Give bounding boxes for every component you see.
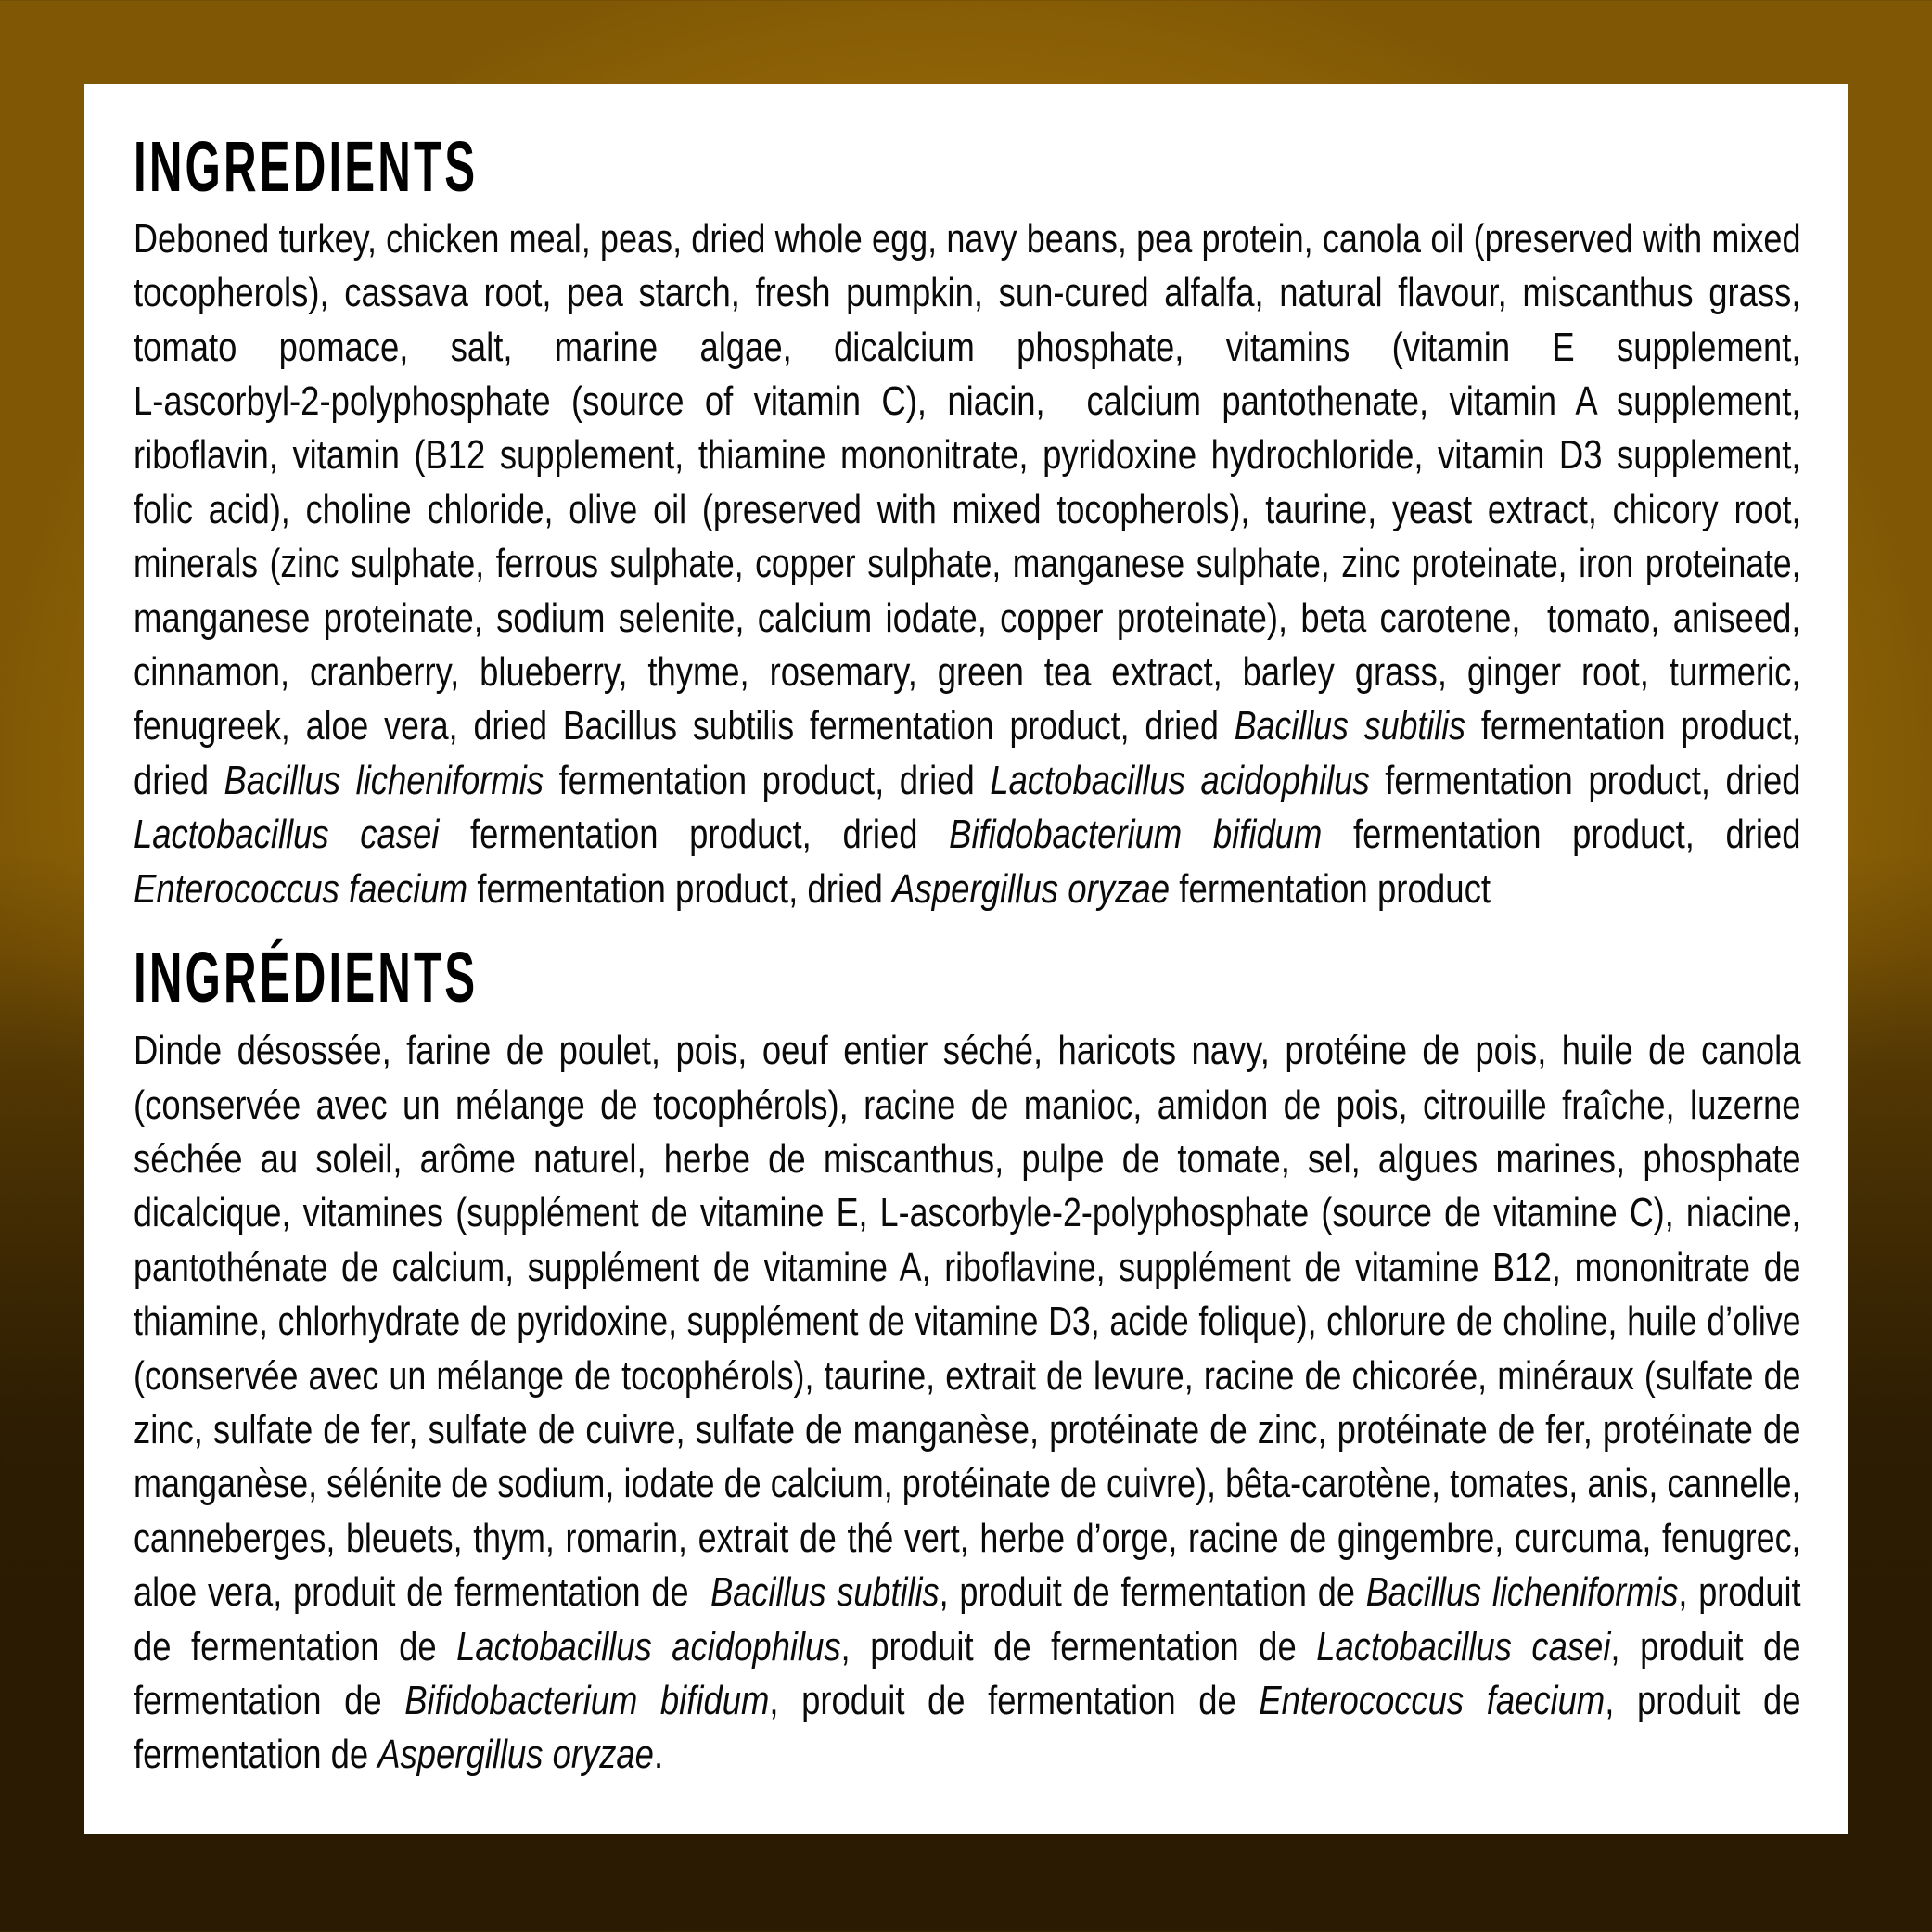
- text block: French ingredients: [134, 1028, 1801, 1777]
- text block: French ingredients: aloe vera, produit de fermentation de Bacillus subtilis, produit de fermentation de Bacillus licheniformis, produit: [134, 1569, 1800, 1615]
- heading: INGRÉDIENTS: INGRÉDIENTS: [134, 937, 478, 1017]
- text block: English ingredients: L-ascorbyl-2-polyphosphate (source of vitamin C), niacin, calcium pantothenate, vitamin A supplement,: [134, 378, 1800, 424]
- text block: French ingredients: de fermentation de Lactobacillus acidophilus, produit de fermentation de Lactobacillus casei, produit de: [134, 1624, 1800, 1670]
- text block: English ingredients: tocopherols), cassava root, pea starch, fresh pumpkin, sun-cured alfalfa, natural flavour, miscanthus grass,: [134, 270, 1800, 315]
- text block: English ingredients: fenugreek, aloe vera, dried Bacillus subtilis fermentation product, dried Bacillus subtilis fermentation product,: [134, 703, 1800, 748]
- text block: French ingredients: dicalcique, vitamines (supplément de vitamine E, L-ascorbyle-2-polyphosphate (source de vitamine C), niacine,: [134, 1190, 1800, 1235]
- text block: French ingredients: canneberges, bleuets, thym, romarin, extrait de thé vert, herbe d’orge, racine de gingembre, curcuma, fenugrec,: [134, 1516, 1800, 1561]
- text block: French ingredients: fermentation de Bifidobacterium bifidum, produit de fermentation de Enterococcus faecium, produit de: [134, 1678, 1800, 1723]
- text block: French ingredients: zinc, sulfate de fer, sulfate de cuivre, sulfate de manganèse, protéinate de zinc, protéinate de fer, protéinate de: [134, 1407, 1800, 1452]
- text block: English ingredients: minerals (zinc sulphate, ferrous sulphate, copper sulphate, manganese sulphate, zinc proteinate, iron proteinate,: [134, 541, 1800, 586]
- text block: English ingredients: dried Bacillus licheniformis fermentation product, dried Lactobacillus acidophilus fermentation product, dried: [134, 758, 1800, 803]
- text block: English ingredients: [134, 216, 1800, 912]
- text block: French ingredients: (conservée avec un mélange de tocophérols), racine de manioc, amidon de pois, citrouille fraîche, luzerne: [134, 1082, 1800, 1128]
- text block: French ingredients: séchée au soleil, arôme naturel, herbe de miscanthus, pulpe de tomate, sel, algues marines, phosphate: [134, 1136, 1800, 1182]
- text block: English ingredients: riboflavin, vitamin (B12 supplement, thiamine mononitrate, pyridoxine hydrochloride, vitamin D3 supplement,: [134, 432, 1800, 478]
- heading: INGREDIENTS: INGREDIENTS: [134, 126, 478, 206]
- text block: French ingredients: manganèse, sélénite de sodium, iodate de calcium, protéinate de cuivre), bêta-carotène, tomates, anis, cannelle,: [134, 1461, 1800, 1506]
- text block: English ingredients: tomato pomace, salt, marine algae, dicalcium phosphate, vitamins (vitamin E supplement,: [134, 325, 1800, 370]
- text block: French ingredients: fermentation de Aspergillus oryzae.: [134, 1732, 663, 1777]
- text block: English ingredients: Enterococcus faecium fermentation product, dried Aspergillus oryzae fermentation product: [134, 866, 1491, 912]
- text block: English ingredients: Deboned turkey, chicken meal, peas, dried whole egg, navy beans, pea protein, canola oil (preserved with mixed: [134, 216, 1800, 262]
- text block: English ingredients: Lactobacillus casei fermentation product, dried Bifidobacterium bifidum fermentation product, dried: [134, 812, 1800, 857]
- text block: French ingredients: Dinde désossée, farine de poulet, pois, oeuf entier séché, haricots navy, protéine de pois, huile de canola: [134, 1028, 1800, 1073]
- text block: English ingredients: cinnamon, cranberry, blueberry, thyme, rosemary, green tea extract, barley grass, ginger root, turmeric,: [134, 649, 1800, 695]
- text block: French ingredients: thiamine, chlorhydrate de pyridoxine, supplément de vitamine D3, acide folique), chlorure de choline, huile d’olive: [134, 1299, 1800, 1344]
- text block: English ingredients: manganese proteinate, sodium selenite, calcium iodate, copper proteinate), beta carotene, tomato, aniseed,: [134, 595, 1800, 641]
- text block: English ingredients: folic acid), choline chloride, olive oil (preserved with mixed tocopherols), taurine, yeast extract, chicory root,: [134, 487, 1800, 532]
- text block: French ingredients: pantothénate de calcium, supplément de vitamine A, riboflavine, supplément de vitamine B12, mononitrate de: [134, 1245, 1800, 1290]
- text block: French ingredients: (conservée avec un mélange de tocophérols), taurine, extrait de levure, racine de chicorée, minéraux (sulfate de: [134, 1353, 1800, 1399]
